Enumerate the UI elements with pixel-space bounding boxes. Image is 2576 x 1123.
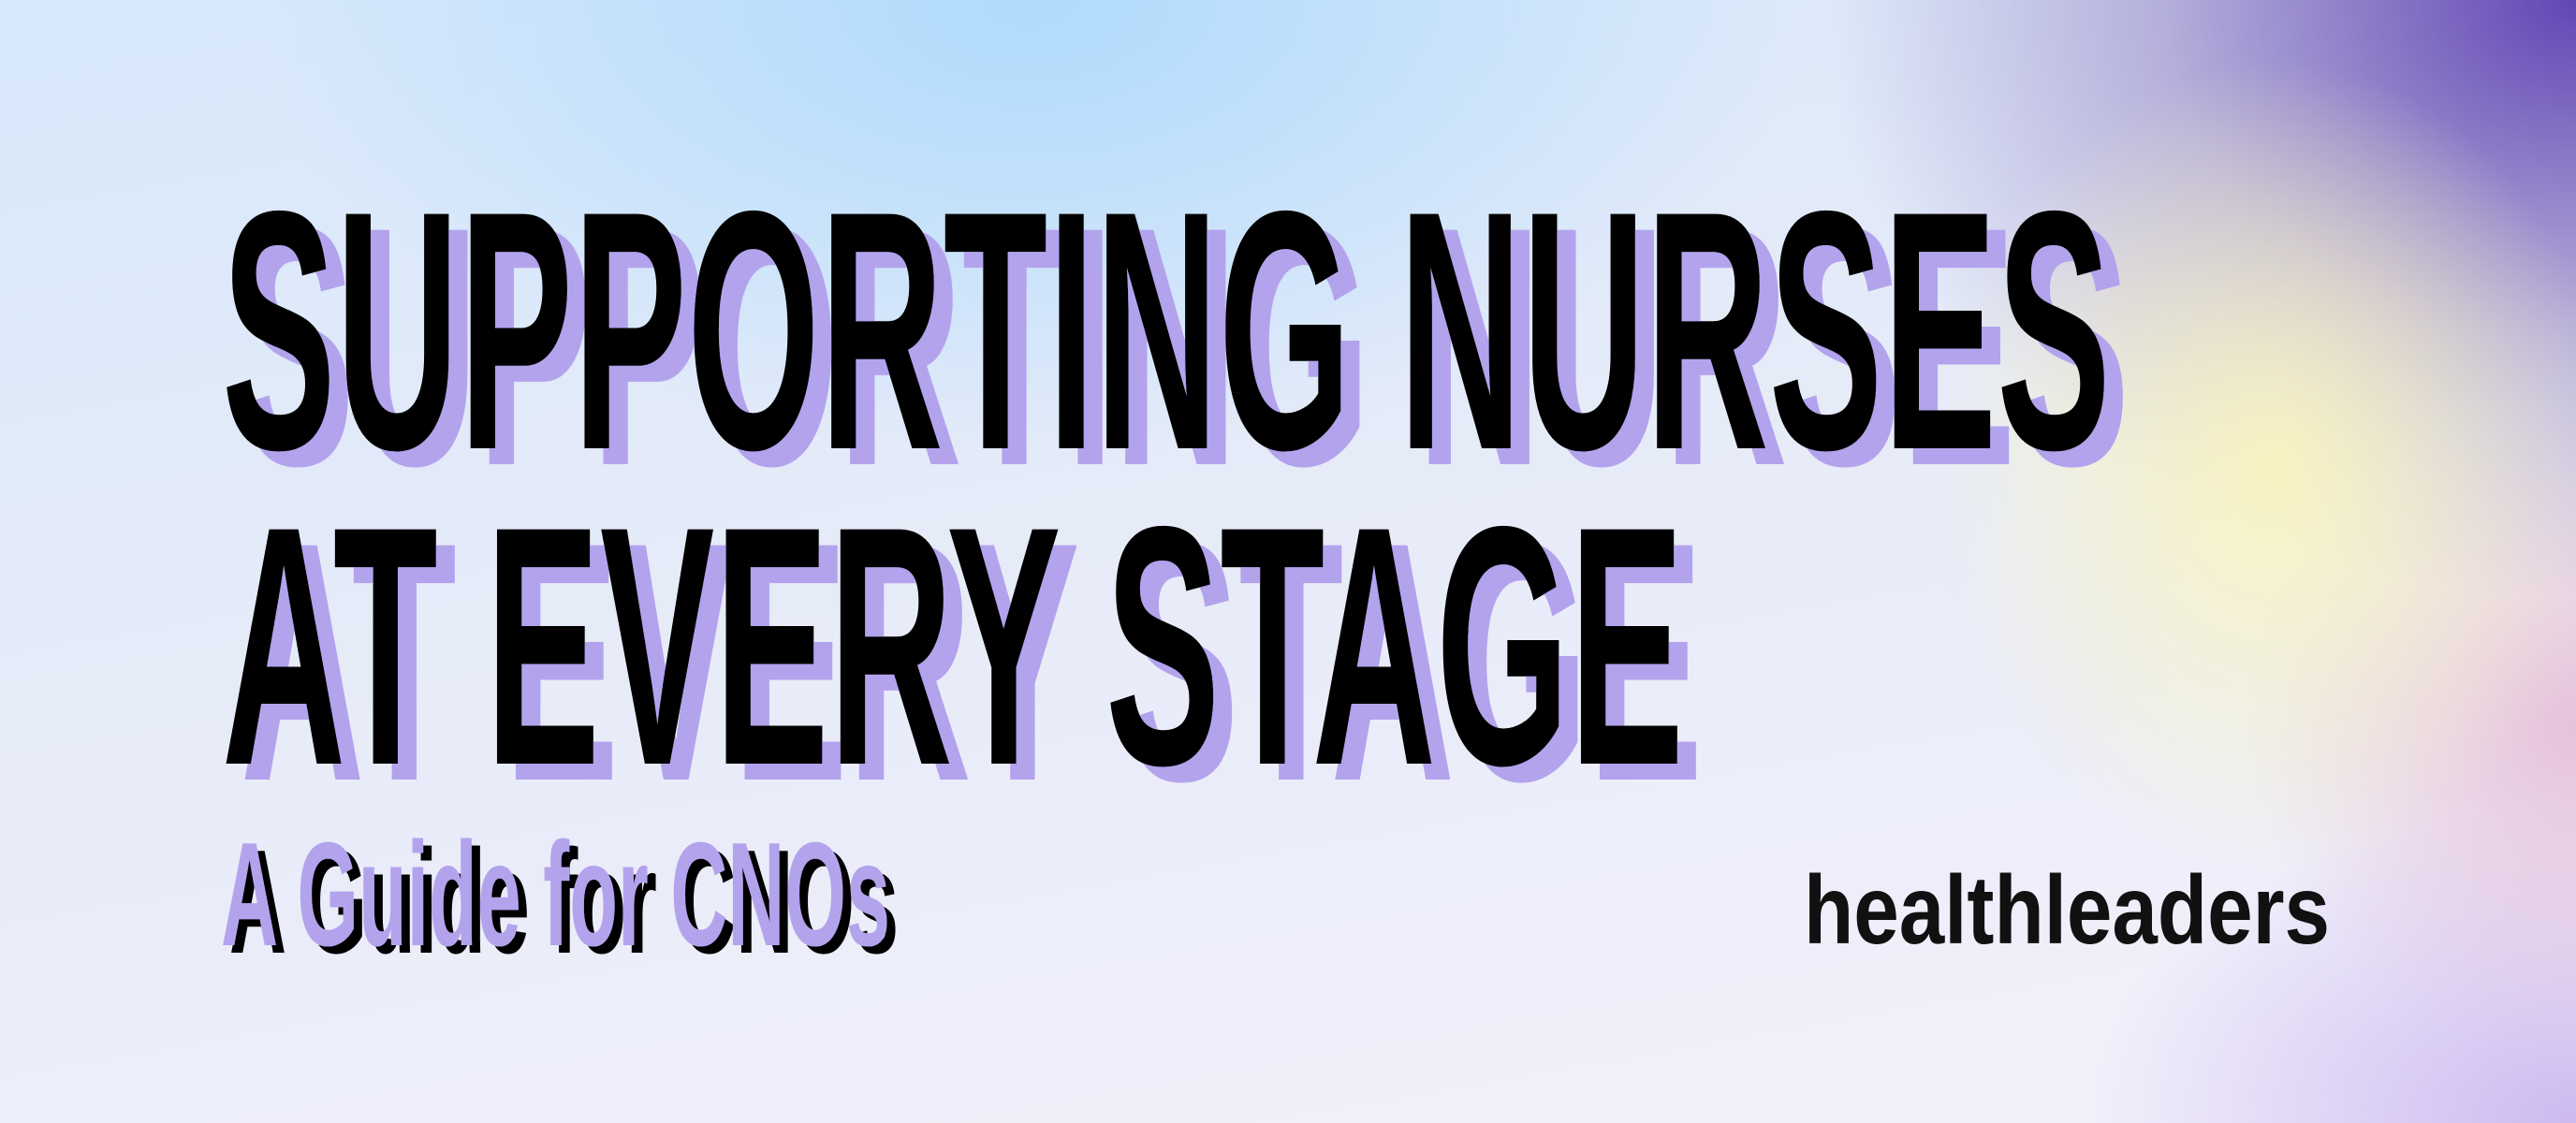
title	[222, 140, 2111, 837]
logo: healthleaders: healthleaders	[1804, 856, 2330, 965]
subtitle: A Guide for CNOs	[221, 812, 890, 977]
